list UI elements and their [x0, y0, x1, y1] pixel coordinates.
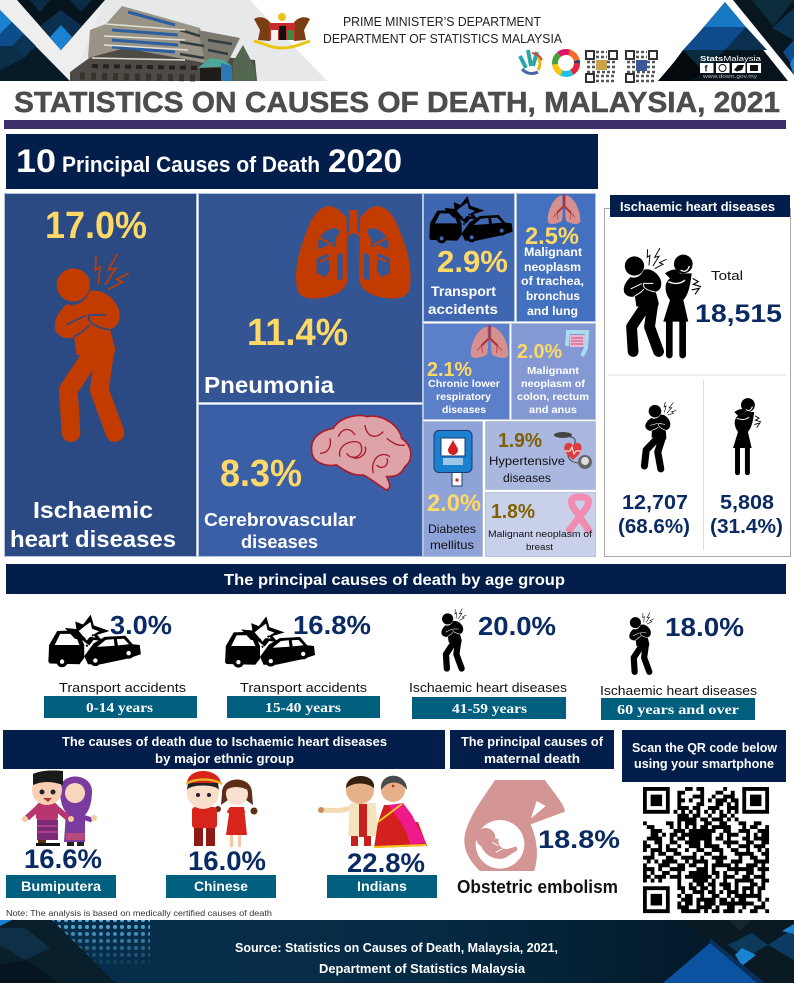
StatsMalaysia social block: Stats Malaysia [700, 56, 761, 63]
ethnic group: Indians [318, 776, 437, 898]
treemap tile: transport accidents [424, 194, 514, 322]
heading: by ethnic group [3, 730, 445, 769]
heading: scan QR: using your smartphone [634, 756, 774, 771]
value 11.4%: 11.4% [247, 312, 348, 354]
label [428, 522, 476, 552]
footer left triangle pattern [0, 920, 116, 983]
source line: Source: Statistics on Causes of Death, Malaysia, 2021, [235, 941, 558, 955]
age band: 41-59 years [452, 702, 528, 717]
label [489, 454, 565, 485]
icon: man [629, 612, 654, 672]
cause: Transport accidents [59, 680, 187, 695]
label: Cerebrovascular [204, 510, 356, 530]
icon: car crash [225, 617, 315, 668]
value 2.9%: 2.9% [437, 244, 508, 279]
heading: maternal death: maternal death [484, 751, 580, 766]
icon: brain [311, 415, 411, 490]
heading: by ethnic group: The causes of death due to Ischaemic heart diseases [62, 734, 387, 749]
label [517, 365, 589, 416]
icon: man with chest pain [55, 254, 129, 433]
icon: pregnant silhouette [464, 780, 565, 871]
icon: intestine [567, 332, 587, 356]
label: respiratory [436, 391, 491, 403]
age group: 41-59 years [409, 609, 568, 719]
icon: lungs [296, 206, 411, 299]
illustration: Chinese children [186, 771, 258, 847]
maternal death block [457, 780, 620, 897]
label: Transport [431, 283, 496, 299]
treemap tile: malignant neoplasm of breast [486, 492, 596, 556]
heading: maternal death [450, 730, 614, 769]
value: 16.6% [24, 844, 102, 874]
age band: 15-40 years [265, 701, 342, 716]
header banner: DEPARTMENT OF STATISTICS MALAYSIA [323, 32, 563, 46]
label: colon, rectum [517, 391, 589, 403]
treemap tile: chronic lower respiratory diseases [424, 324, 510, 420]
band: Indians [357, 878, 407, 894]
logo: SDG wheel [555, 52, 577, 74]
label [428, 378, 500, 416]
total [695, 268, 782, 328]
StatsMalaysia social block: f [704, 64, 708, 74]
heading: by age group: The principal causes of death by age group [224, 572, 565, 589]
label: mellitus [430, 538, 474, 552]
icon: car crash [429, 197, 513, 243]
label: diseases [442, 404, 486, 416]
title underline bar [4, 120, 786, 129]
heading: 10 principal causes: 2020 [328, 143, 402, 179]
female figure [710, 492, 783, 538]
total: Total [711, 268, 743, 283]
label: Chronic lower [428, 378, 500, 390]
value 2.0%: 2.0% [517, 341, 562, 363]
label: Pneumonia [204, 372, 334, 398]
footer [0, 920, 794, 983]
treemap tile: ischaemic heart diseases [4, 194, 196, 556]
male figure: 12,707 [622, 492, 688, 514]
icon: pink lungs [548, 194, 580, 224]
department name: PRIME MINISTER’S DEPARTMENT [343, 15, 541, 29]
age band [44, 696, 197, 718]
header right triangle pattern [658, 0, 794, 81]
note: Note: The analysis is based on medically certified causes of death [6, 908, 272, 918]
band: Chinese [194, 878, 248, 894]
age group: 60 years and over [600, 612, 758, 720]
header left triangle pattern [0, 0, 105, 81]
icon: blood pressure monitor [554, 432, 592, 469]
value: 16.0% [188, 846, 266, 876]
age band [227, 696, 380, 718]
label: Hypertensive [489, 454, 565, 468]
label: neoplasm [524, 262, 581, 274]
value: 3.0% [110, 610, 172, 640]
age band: 0-14 years [86, 701, 154, 716]
header banner [0, 0, 794, 83]
label [488, 529, 592, 553]
label [10, 497, 176, 552]
label: Obstetric embolism [457, 877, 618, 897]
source line [235, 941, 558, 976]
heading: maternal death: The principal causes of [461, 734, 604, 749]
panel heading: Ischaemic heart diseases [620, 199, 775, 214]
icon: man and woman [624, 248, 701, 355]
icon: car crash [48, 615, 141, 667]
label [204, 510, 356, 552]
label: breast [526, 542, 553, 553]
value: 22.8% [347, 848, 425, 878]
treemap tile: cerebrovascular diseases [198, 404, 422, 556]
label: Malignant [524, 247, 582, 259]
heading: by age group [6, 564, 786, 594]
age group: 0-14 years [44, 610, 197, 718]
cause: Ischaemic heart diseases [600, 683, 758, 698]
male figure: (68.6%) [618, 516, 690, 538]
treemap tile: colon, rectum and anus [512, 324, 596, 420]
icon: glucose meter [434, 430, 472, 486]
value 17.0%: 17.0% [45, 205, 147, 247]
label: Malignant [527, 365, 580, 377]
cause: Ischaemic heart diseases [409, 680, 568, 695]
StatsMalaysia social block: www.dosm.gov.my [702, 74, 757, 80]
treemap tile: pneumonia [198, 194, 422, 402]
national emblem [254, 13, 310, 48]
icon: man [638, 398, 678, 470]
female figure: 5,808 [720, 492, 774, 514]
heading: 10 principal causes: Principal Causes of Death [62, 152, 320, 177]
label: Ischaemic [33, 497, 153, 523]
label: accidents [428, 301, 498, 317]
label: diseases [503, 471, 551, 485]
illustration: Indian children [318, 776, 427, 848]
label: Malignant neoplasm of [488, 529, 592, 540]
ethnic group: Chinese [166, 771, 276, 898]
label: of trachea, [521, 276, 584, 288]
label: bronchus [526, 291, 580, 303]
label: and lung [527, 306, 578, 318]
icon: pink lungs [471, 325, 508, 358]
treemap tile: trachea, bronchus and lung [516, 194, 596, 322]
cause: Transport accidents [240, 680, 368, 695]
heading: 10 principal causes: 10 [16, 143, 56, 179]
panel: ischaemic heart diseases by sex [604, 195, 790, 556]
treemap tile: hypertensive diseases [486, 422, 596, 490]
heading: by ethnic group: by major ethnic group [155, 751, 294, 766]
heading: 10 principal causes [6, 134, 598, 189]
heading: scan QR: Scan the QR code below [632, 740, 778, 755]
total: 18,515 [695, 300, 782, 328]
ethnic group: Bumiputera [6, 770, 116, 898]
label: diseases [241, 532, 318, 552]
band: Bumiputera [21, 878, 101, 894]
illustration: Malay children [22, 770, 97, 846]
label [521, 247, 584, 318]
label [428, 283, 498, 317]
age band: 60 years and over [617, 703, 739, 718]
value 1.9%: 1.9% [498, 430, 542, 452]
age band [601, 698, 755, 720]
StatsMalaysia social block [700, 56, 761, 80]
value 2.0%: 2.0% [427, 490, 481, 517]
label: neoplasm of [521, 378, 586, 390]
main title: STATISTICS ON CAUSES OF DEATH, MALAYSIA, 2021 [14, 87, 780, 119]
age group: 15-40 years [225, 610, 380, 718]
value: 18.0% [665, 612, 744, 642]
label: and anus [529, 404, 577, 416]
age band [412, 697, 566, 719]
value 8.3%: 8.3% [220, 453, 302, 495]
QR code [643, 789, 769, 911]
value: 20.0% [478, 611, 556, 641]
label: Diabetes [428, 522, 476, 536]
source line: Department of Statistics Malaysia [319, 962, 526, 976]
building photo [70, 6, 257, 81]
heading: scan QR [622, 730, 786, 782]
male figure [618, 492, 690, 538]
icon: pink ribbon [568, 497, 590, 532]
icon: woman [733, 398, 761, 473]
value: 16.8% [293, 610, 371, 640]
icon: man [441, 609, 466, 669]
value 2.5%: 2.5% [525, 223, 579, 250]
panel heading [610, 195, 790, 217]
value 2.1%: 2.1% [427, 359, 472, 381]
treemap tile: diabetes mellitus [424, 422, 482, 556]
value 1.8%: 1.8% [491, 501, 535, 523]
logo: census [520, 50, 542, 74]
footer right triangle pattern [663, 920, 794, 983]
female figure: (31.4%) [710, 516, 783, 538]
label: heart diseases [10, 526, 176, 552]
small QR codes [585, 50, 658, 83]
value: 18.8% [538, 826, 620, 854]
